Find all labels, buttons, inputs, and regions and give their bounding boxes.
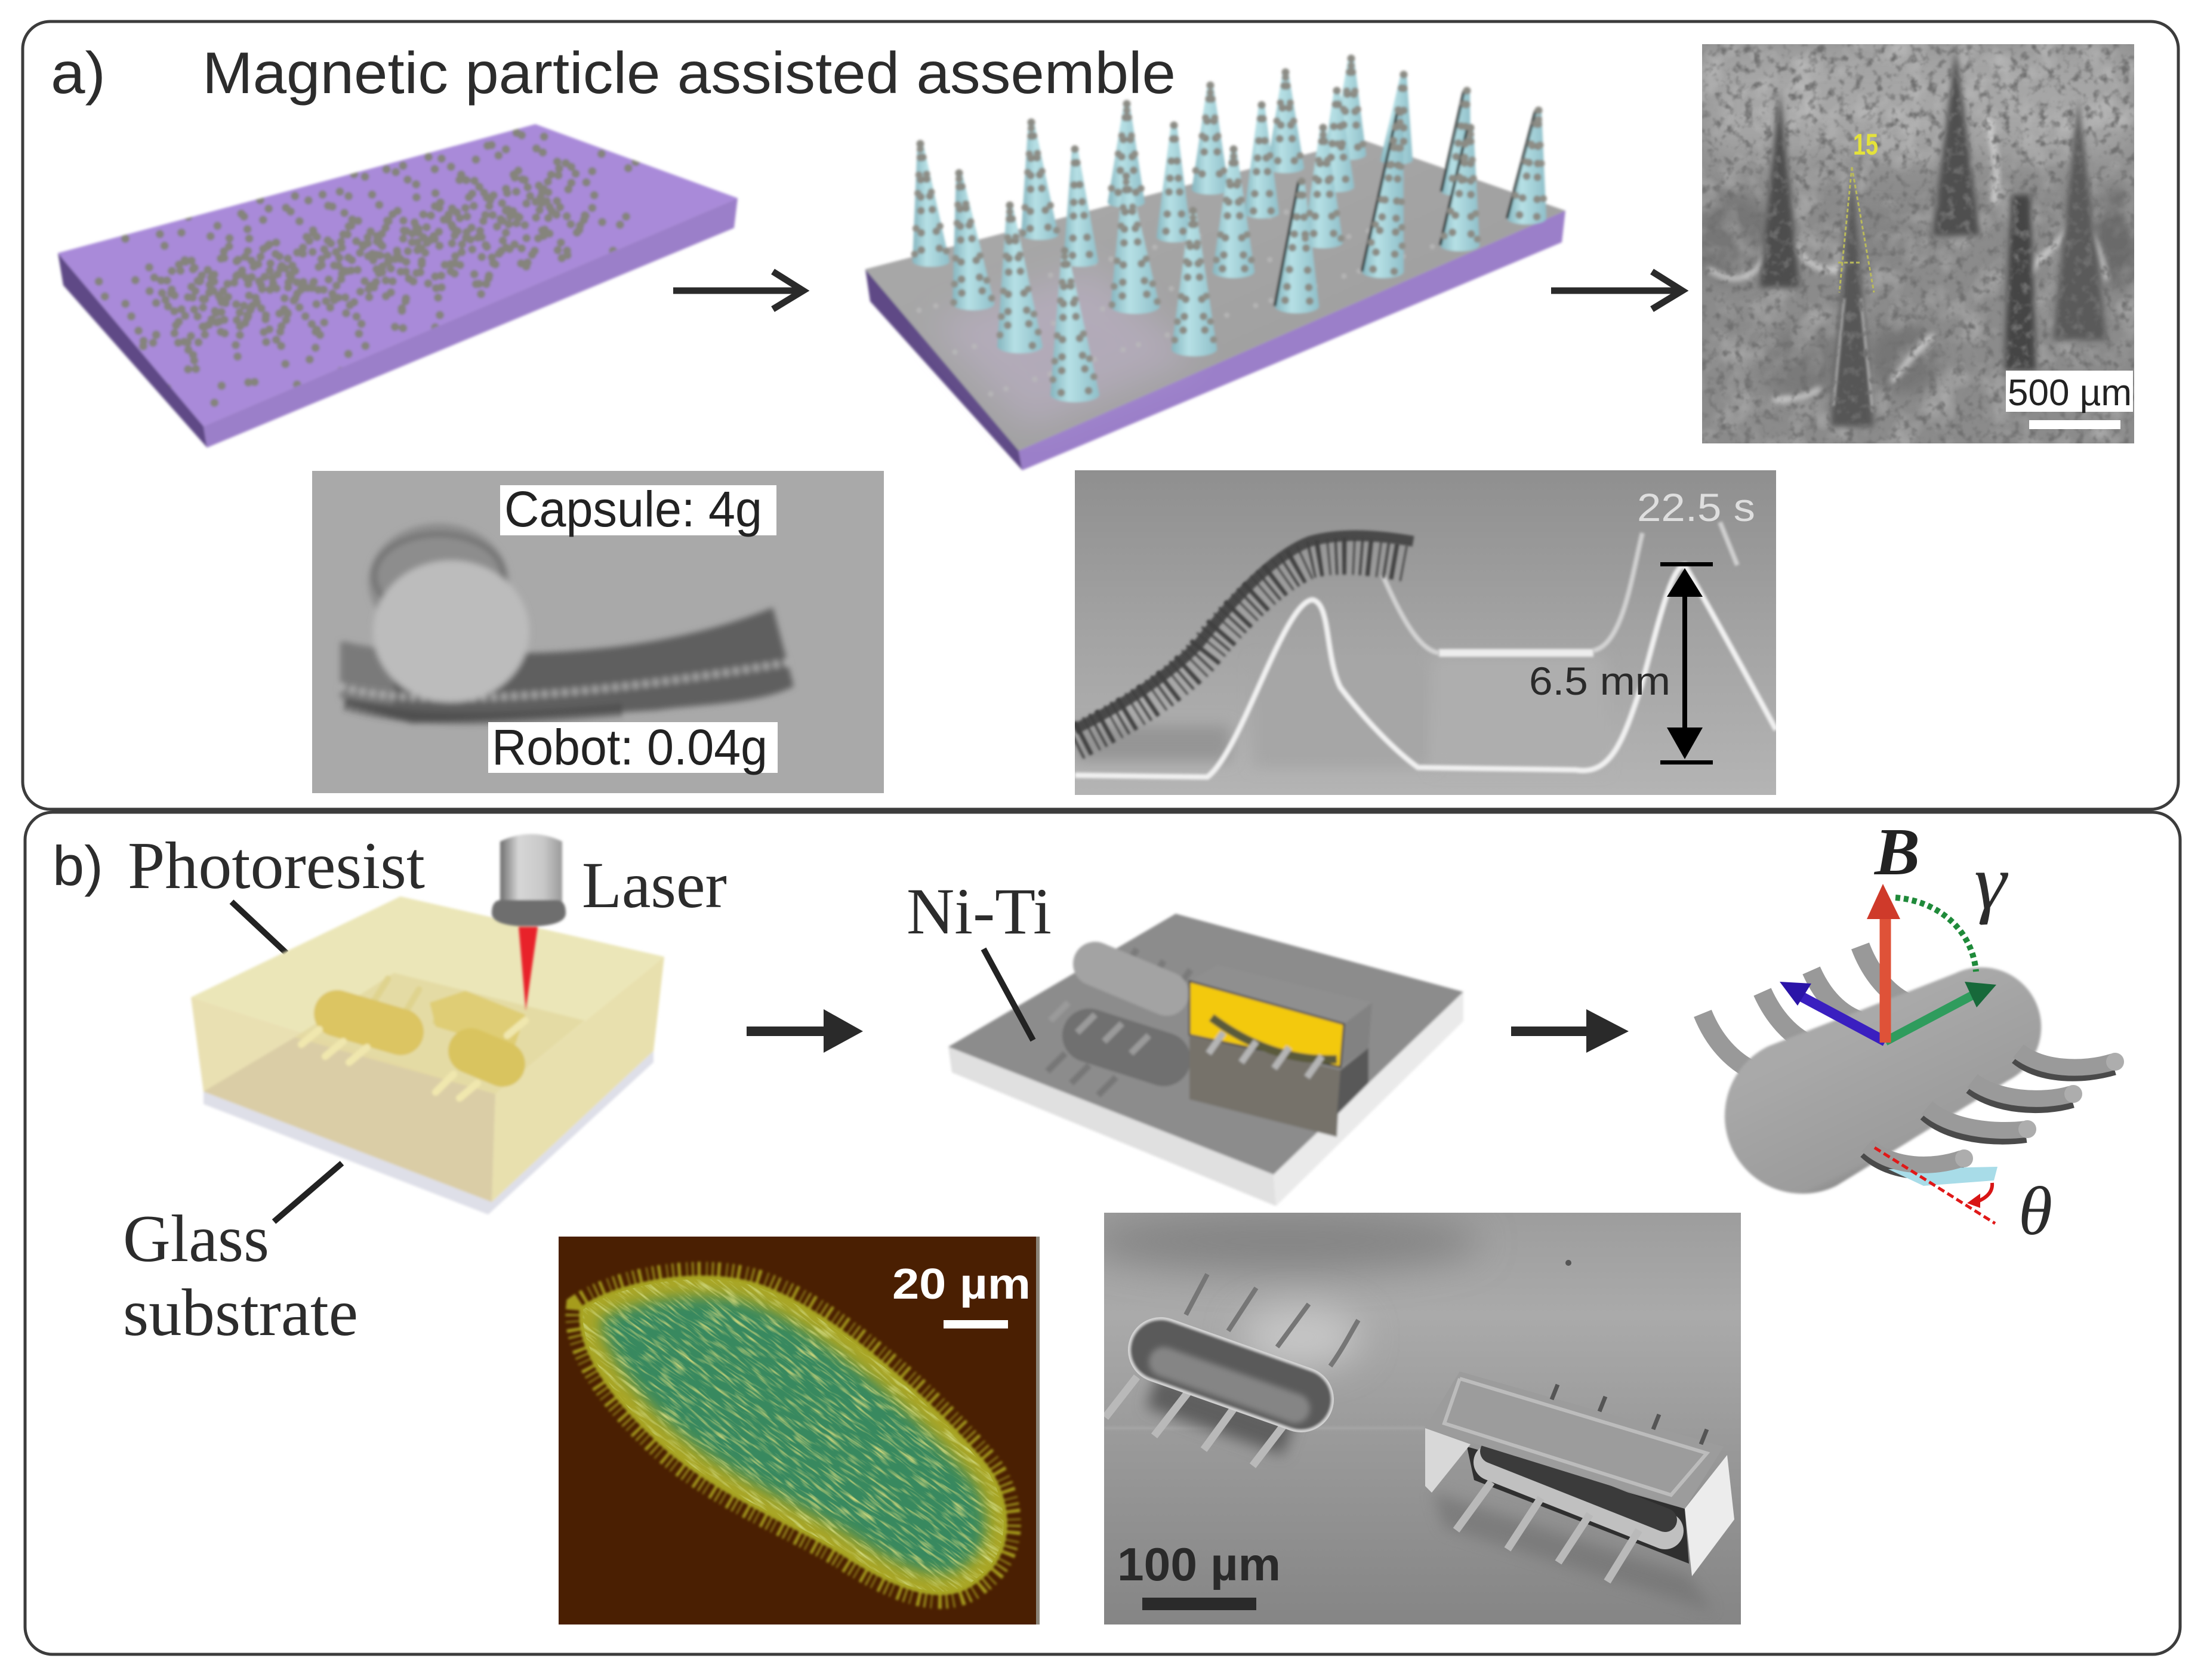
near needles xyxy=(1050,1003,1149,1053)
capsule shadow xyxy=(1089,1035,1164,1059)
cone slab front side xyxy=(1019,211,1565,470)
glass leader xyxy=(274,1163,342,1222)
angle label: 15 xyxy=(1853,128,1878,161)
right strip xyxy=(1036,1237,1040,1624)
dark band xyxy=(1086,1212,1480,1271)
gamma label: γ xyxy=(1974,840,2009,926)
mid plateau xyxy=(1253,659,1432,767)
SEM background xyxy=(1104,1213,1741,1624)
photo background xyxy=(312,471,884,793)
robot spiky body xyxy=(1075,536,1413,729)
lower leg shadows xyxy=(1867,1055,2113,1169)
shell underside xyxy=(1467,1447,1689,1564)
robot dark fringe xyxy=(346,704,621,719)
glass base xyxy=(204,1051,654,1214)
cell cilia fringe xyxy=(582,1279,1004,1592)
brown background xyxy=(559,1237,1040,1624)
far needles xyxy=(1122,949,1191,991)
SEM of fabricated robots xyxy=(1086,1212,1741,1624)
robot left piece xyxy=(340,642,394,704)
green axis xyxy=(1885,994,1975,1041)
cone dark edges xyxy=(1275,91,1536,306)
height label: 6.5 mm xyxy=(1529,659,1670,703)
obstacle white outline xyxy=(1075,565,1776,777)
cell texture xyxy=(582,1280,1004,1592)
robot highlight xyxy=(1164,1362,1295,1408)
yellow shell xyxy=(430,991,525,1050)
faint outlines xyxy=(1383,522,1737,653)
photoresist label: Photoresist xyxy=(128,829,425,903)
arrow: photoresist to coating xyxy=(747,1009,863,1053)
3D robot with axes xyxy=(1703,815,2124,1250)
photo: robot climbing obstacle xyxy=(1075,470,1776,795)
surface dots xyxy=(919,197,1456,394)
shell right wall xyxy=(1685,1455,1734,1576)
yellow robot xyxy=(301,979,449,1062)
slab left side xyxy=(58,253,207,448)
capsule front xyxy=(373,560,529,702)
B label: B xyxy=(1873,815,1920,889)
base left side xyxy=(948,1047,1276,1206)
photoresist block xyxy=(191,896,664,1214)
angle theta arc xyxy=(1973,1183,1992,1203)
robot shadow xyxy=(1152,1391,1289,1438)
panel a frame xyxy=(23,21,2178,809)
substrate label: substrate xyxy=(123,1276,358,1350)
robot sheet xyxy=(344,608,794,723)
shell left wall xyxy=(1425,1428,1471,1493)
shell lower needles xyxy=(1456,1482,1639,1582)
arrow: coating to robot xyxy=(1511,1009,1629,1053)
capsule back stripe xyxy=(374,534,503,618)
leg tips xyxy=(1955,1053,2124,1167)
spikes xyxy=(1759,90,1800,288)
cilia texture xyxy=(582,1280,1004,1592)
cyan angle wedge xyxy=(1888,1167,1998,1186)
laser label: Laser xyxy=(582,849,727,921)
lower needles xyxy=(1047,1053,1116,1095)
theta label: θ xyxy=(2018,1173,2052,1250)
shell top needles xyxy=(1552,1385,1707,1444)
Ni-Ti leader xyxy=(984,949,1033,1040)
panel b frame xyxy=(25,812,2180,1654)
SEM base xyxy=(1702,44,2134,443)
shell top frame xyxy=(1444,1379,1707,1495)
speck xyxy=(1565,1260,1571,1266)
base shade xyxy=(1075,725,1230,761)
laser head xyxy=(492,834,566,1010)
photo background xyxy=(1075,470,1776,795)
laser body xyxy=(500,834,562,904)
light glow behind robot xyxy=(1241,1307,1361,1367)
slab front side xyxy=(204,198,738,448)
yellow needles xyxy=(436,1021,525,1098)
scale label: 500 µm xyxy=(2008,372,2132,414)
purple substrate with particles xyxy=(56,123,739,449)
blue axis xyxy=(1799,995,1885,1041)
robot label: Robot: 0.04g xyxy=(492,719,767,775)
arrow: cones to SEM xyxy=(1551,272,1682,309)
lower legs xyxy=(1867,1051,2113,1165)
cones xyxy=(913,58,1546,402)
Ni-Ti label: Ni-Ti xyxy=(907,875,1052,948)
capsule label box xyxy=(500,485,776,535)
shell top xyxy=(1189,965,1372,1024)
yellow capsule in shell xyxy=(471,1051,503,1064)
right plateau xyxy=(1432,656,1605,770)
panel a label: a) xyxy=(51,40,106,106)
scale bar xyxy=(944,1320,1008,1328)
green arrow head xyxy=(1965,982,1996,1007)
robot label box xyxy=(488,722,778,773)
robot lower needles xyxy=(1105,1377,1288,1466)
cone array on substrate xyxy=(865,58,1565,470)
robot upper needles xyxy=(1186,1274,1358,1366)
shell top xyxy=(1425,1371,1724,1509)
angle theta head xyxy=(1967,1194,1980,1208)
scale label: 20 µm xyxy=(892,1260,1031,1308)
coated top xyxy=(948,914,1463,1175)
block inner floor xyxy=(204,1037,495,1202)
robot body xyxy=(1725,967,2041,1194)
height double arrow xyxy=(1660,562,1713,765)
red axis xyxy=(1880,916,1891,1043)
SEM image of cones xyxy=(1689,44,2148,443)
yellow rim shading xyxy=(582,1279,1004,1592)
window capsule shadow xyxy=(1212,1018,1337,1059)
photo: capsule on robot xyxy=(312,471,884,793)
scale bar xyxy=(2029,420,2120,429)
window needles xyxy=(1209,1032,1322,1077)
robot body xyxy=(1161,1350,1301,1400)
shell capsule xyxy=(1492,1462,1665,1531)
shell capsule shade xyxy=(1492,1451,1665,1520)
particles xyxy=(93,128,641,408)
particles on cones xyxy=(920,58,1539,394)
scale label box xyxy=(2006,371,2133,412)
block right xyxy=(492,957,664,1202)
scale bar xyxy=(1142,1598,1256,1610)
blue arrow head xyxy=(1780,982,1811,1006)
scale label: 100 µm xyxy=(1117,1538,1281,1590)
capsule xyxy=(1095,964,1167,994)
particles on cone edges xyxy=(914,66,1545,394)
panel a title: Magnetic particle assisted assemble xyxy=(202,40,1176,106)
robot bright edge xyxy=(340,662,788,698)
arrow: substrate to cones xyxy=(673,272,803,309)
lower shell side xyxy=(1337,1048,1368,1115)
coated structure on substrate xyxy=(948,914,1463,1206)
yellow window xyxy=(1189,981,1344,1067)
panel a: magnetic particle assisted assembly xyxy=(23,21,2178,809)
horizontal seam xyxy=(1104,1428,1425,1429)
panel b: laser fabrication of cilia robot xyxy=(25,812,2180,1678)
red arrow head xyxy=(1867,884,1900,919)
slab top xyxy=(58,124,738,426)
capsule label: Capsule: 4g xyxy=(504,481,762,537)
time stamp: 22.5 s xyxy=(1637,485,1755,529)
cone slab left side xyxy=(865,269,1022,470)
cone slab top xyxy=(865,140,1565,451)
cell body xyxy=(582,1279,1004,1592)
photoresist leader xyxy=(232,902,286,953)
upper legs xyxy=(1703,946,1907,1074)
glass label: Glass xyxy=(123,1202,269,1276)
capsule back xyxy=(368,523,509,640)
inner window xyxy=(295,973,585,1094)
block top xyxy=(191,896,664,1094)
panel b label: b) xyxy=(53,834,103,897)
base right side xyxy=(1274,992,1463,1206)
lilac haze xyxy=(931,269,1200,430)
block front left xyxy=(191,997,495,1202)
shell shadow xyxy=(1432,1492,1713,1611)
SEM of paramecium xyxy=(559,1237,1040,1624)
laser collar xyxy=(492,900,566,926)
lower shell xyxy=(1189,1035,1340,1137)
laser beam xyxy=(519,927,538,1010)
robot rim xyxy=(1161,1350,1301,1400)
angle theta marks xyxy=(1875,1148,1995,1223)
shell side xyxy=(1340,1003,1372,1067)
green dotted arc xyxy=(1895,898,1976,972)
